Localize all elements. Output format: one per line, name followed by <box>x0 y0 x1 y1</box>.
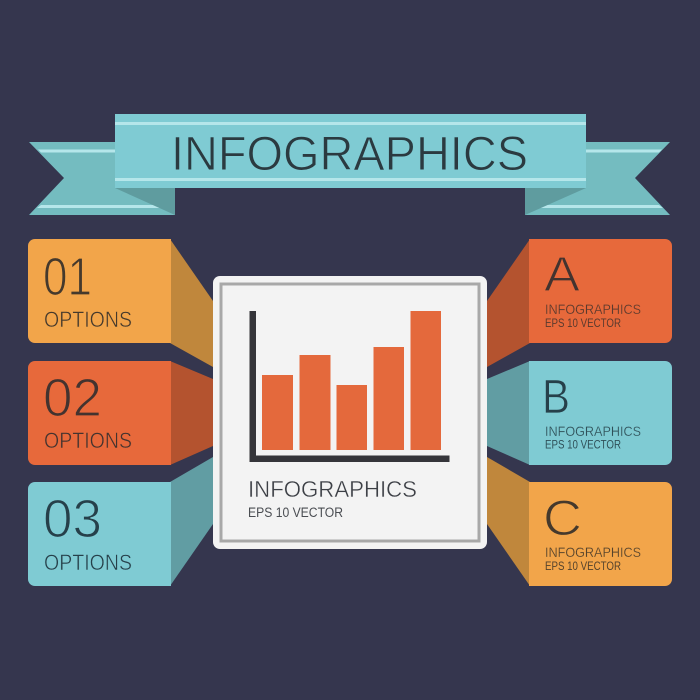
ribbon right tail <box>525 142 670 215</box>
panel: option B <box>487 361 672 465</box>
ribbon main band <box>115 114 586 188</box>
panel: option 01: 01 <box>43 247 92 307</box>
panel: option C <box>487 457 672 586</box>
panel: option 02: 02 <box>43 368 102 428</box>
panel: option 03: OPTIONS <box>44 550 132 575</box>
panel: option A: INFOGRAPHICS <box>545 301 641 317</box>
card heading: INFOGRAPHICS <box>248 476 417 502</box>
bar chart <box>250 311 450 462</box>
panel: option C: C <box>543 490 582 546</box>
panel: option 01: OPTIONS <box>44 307 132 332</box>
panel: option 02: OPTIONS <box>44 428 132 453</box>
panel: option C: INFOGRAPHICS <box>545 544 641 560</box>
panel: option B: EPS 10 VECTOR <box>545 438 621 452</box>
panel: option A <box>487 239 672 367</box>
panel: option 02 <box>28 361 213 465</box>
panel: option B: INFOGRAPHICS <box>545 423 641 439</box>
panel: option C: EPS 10 VECTOR <box>545 559 621 573</box>
title ribbon <box>29 114 670 215</box>
ribbon left tail <box>29 142 175 215</box>
panel: central chart card <box>213 276 487 549</box>
panel: option A: EPS 10 VECTOR <box>545 316 621 330</box>
panel: option 03 <box>28 457 213 586</box>
title text: INFOGRAPHICS <box>171 128 528 181</box>
panel: option 01 <box>28 239 213 367</box>
panel: option A: A <box>544 248 580 302</box>
panel: option B: B <box>542 371 570 424</box>
panel: option 03: 03 <box>43 489 102 549</box>
card subheading: EPS 10 VECTOR <box>248 505 343 520</box>
